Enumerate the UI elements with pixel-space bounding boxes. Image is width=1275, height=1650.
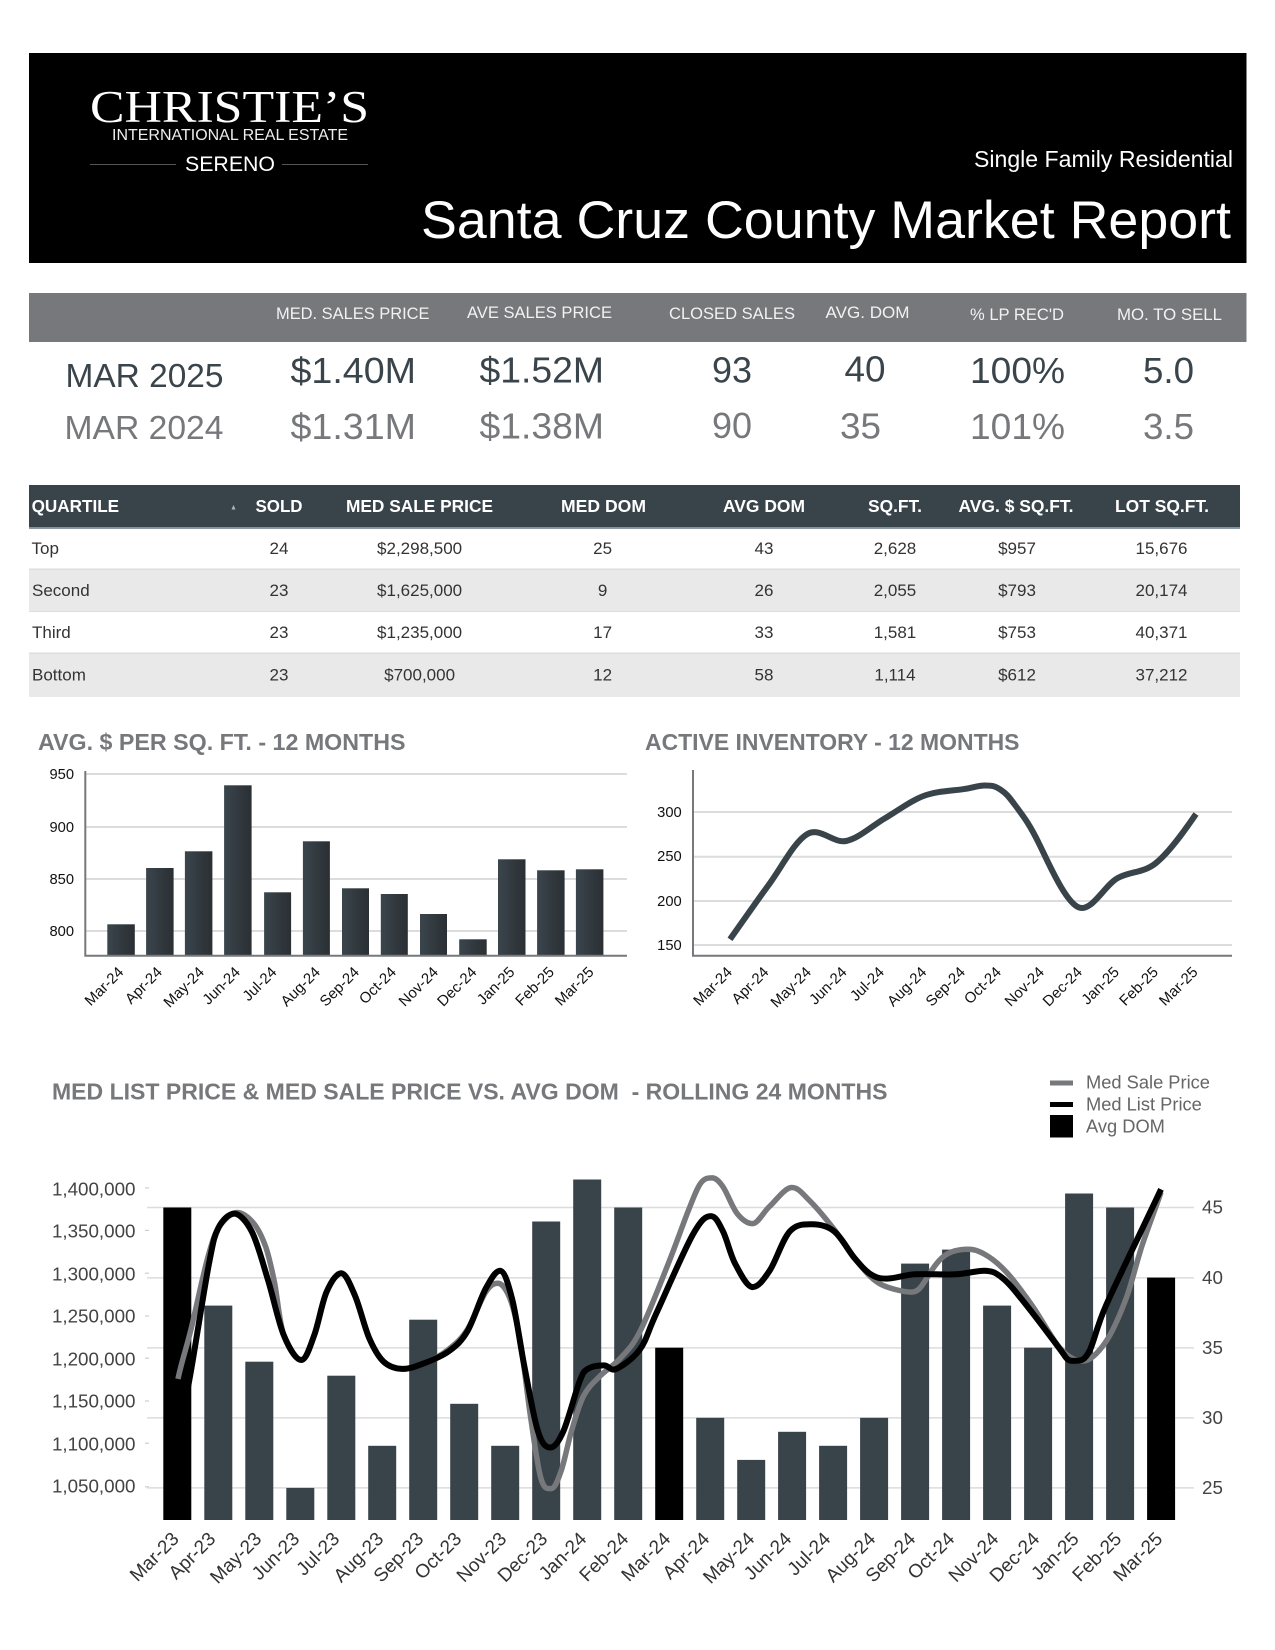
y axis labels [49,767,74,940]
left axis labels: 1,100,000 [52,1433,136,1454]
row: top quartile: 25 [593,539,612,558]
x axis labels: Mar-25 [1110,1529,1167,1586]
current period row: 93 [712,350,752,391]
x axis labels: Oct-24 [961,964,1005,1008]
prior year row: MAR 2024 [64,410,224,447]
row: third quartile: 40,371 [1136,623,1188,642]
row: second quartile: $793 [998,581,1036,600]
subtitle: Single Family Residential [974,146,1233,172]
y axis labels: 300 [657,805,682,821]
med sale price line [178,1178,1161,1489]
x axis labels: Mar-24 [690,964,736,1009]
heading: avg price per sq ft: AVG. $ PER SQ. FT. - 12 MONTHS [38,729,406,755]
left axis labels [52,1179,136,1496]
current period row: 100% [970,350,1065,391]
row: bottom quartile: 37,212 [1136,666,1188,685]
table header: MED SALE PRICE [346,496,493,516]
metric column headers: CLOSED SALES [669,304,795,323]
x axis labels: Sep-24 [862,1528,920,1587]
bar chart: avg price per sq ft [49,767,627,1011]
x axis labels: Oct-24 [904,1528,959,1584]
row: top quartile: Top [32,539,59,558]
table header: LOT SQ.FT. [1115,496,1209,516]
x axis labels: Jul-23 [293,1529,344,1580]
row: top quartile: $2,298,500 [377,539,462,558]
current period row: 40 [844,349,886,390]
x axis labels: Oct-23 [411,1529,466,1584]
x axis labels: Sep-24 [923,964,969,1010]
y axis labels: 950 [49,767,74,783]
x axis labels: Dec-24 [986,1528,1044,1587]
right axis labels: 40 [1202,1267,1223,1288]
table header: SOLD [256,496,302,516]
x axis labels: Jun-24 [806,964,851,1008]
x axis labels: Nov-24 [1002,964,1048,1010]
table header: QUARTILE [32,496,119,516]
x axis labels: Feb-25 [512,964,558,1009]
right axis labels: 45 [1202,1197,1223,1218]
row: second quartile: 2,055 [874,581,916,600]
x axis labels: Sep-24 [317,964,363,1010]
inventory line [730,786,1196,939]
row: third quartile: 33 [755,623,773,642]
legend [1050,1072,1210,1138]
x axis labels: Apr-24 [659,1528,714,1584]
prior year row: 101% [970,406,1065,447]
x axis labels: Jan-25 [1028,1529,1084,1585]
y axis labels: 200 [657,894,682,910]
right axis labels: 25 [1202,1477,1223,1498]
table header [32,496,1209,516]
row: bottom quartile: $612 [998,666,1036,685]
x axis labels: Apr-23 [165,1529,220,1584]
row: second quartile: 20,174 [1136,581,1188,600]
x axis labels: Feb-24 [576,1528,633,1586]
x axis labels: May-24 [767,964,815,1011]
right axis labels: 30 [1202,1407,1223,1428]
left axis labels: 1,200,000 [52,1348,136,1369]
x axis labels: Nov-23 [453,1529,511,1587]
logo: Christie's International Real Estate Sereno: CHRISTIE’S [90,82,369,132]
logo: Christie's International Real Estate Sereno: INTERNATIONAL REAL ESTATE [112,127,348,144]
row: bottom quartile: $700,000 [384,666,455,685]
combo chart: list and sale price vs avg DOM [52,1178,1223,1588]
y axis labels: 850 [49,872,74,888]
x axis labels: Dec-23 [494,1529,552,1587]
x axis labels: Jun-23 [248,1529,304,1585]
x axis labels: Mar-25 [1156,964,1202,1009]
x axis labels: Aug-24 [822,1528,880,1587]
x axis labels [690,964,1202,1011]
x axis labels: Dec-24 [1040,964,1086,1010]
x axis labels: Apr-24 [728,964,772,1008]
right axis labels: 35 [1202,1337,1223,1358]
x axis labels: Aug-23 [330,1529,388,1587]
row: top quartile [32,539,1188,558]
panel: quartile table [29,485,1240,697]
current period row: 5.0 [1143,350,1194,391]
x axis labels: Feb-25 [1116,964,1162,1009]
header banner [29,53,1246,263]
metric column headers: AVE SALES PRICE [467,303,612,322]
row: bottom quartile: 1,114 [874,666,916,685]
prior year row: $1.31M [290,406,416,447]
logo: Christie's International Real Estate Sereno: SERENO [185,153,275,176]
panel: key metrics summary [29,293,1246,447]
row: third quartile: 23 [270,623,288,642]
table header: SQ.FT. [868,496,922,516]
row: top quartile: $957 [998,539,1036,558]
prior year row: $1.38M [480,406,604,447]
med list price line [180,1189,1161,1448]
x axis labels: Mar-24 [618,1528,675,1586]
x axis labels: Sep-23 [370,1529,428,1587]
prior year row [64,405,1194,447]
row: bottom quartile [32,666,1188,685]
row: bottom quartile: 12 [593,666,612,685]
x axis labels [126,1528,1167,1588]
x axis labels: Jun-24 [740,1528,796,1585]
current period row: $1.40M [290,350,416,391]
current period row [66,349,1194,395]
x axis labels: Aug-24 [884,964,930,1010]
row: second quartile: 23 [270,581,288,600]
row: top quartile: 24 [270,539,288,558]
x axis labels: Jan-25 [474,964,518,1008]
left axis labels: 1,150,000 [52,1390,136,1412]
left axis labels: 1,350,000 [52,1220,136,1242]
x axis labels: Mar-24 [82,964,127,1009]
x axis labels: Nov-24 [945,1528,1003,1587]
x axis labels: Jan-25 [1078,964,1123,1008]
right axis labels [1202,1197,1223,1498]
row: third quartile: $753 [998,623,1036,642]
row: third quartile: Third [32,623,71,642]
heading: rolling 24 months: MED LIST PRICE & MED SALE PRICE VS. AVG DOM - ROLLING 24 MONTHS [52,1078,888,1104]
title: Santa Cruz County Market Report [421,191,1231,250]
table header: AVG. $ SQ.FT. [958,496,1074,516]
prior year row: 3.5 [1143,406,1194,447]
left axis labels: 1,250,000 [52,1306,136,1326]
x axis labels: Mar-25 [552,964,597,1009]
x axis labels: May-23 [206,1529,266,1588]
x axis labels: Dec-24 [434,964,480,1010]
y axis labels: 250 [657,849,682,865]
row: third quartile [32,623,1188,642]
y axis labels: 900 [49,820,74,836]
legend: Med Sale Price [1086,1072,1210,1093]
prior year row: 35 [840,406,881,446]
metric column headers: % LP REC'D [970,305,1064,324]
row: bottom quartile: 23 [270,666,288,685]
row: second quartile: 9 [598,581,607,600]
x axis labels: Apr-24 [122,964,166,1008]
legend: Avg DOM [1086,1116,1165,1136]
row: third quartile: $1,235,000 [377,623,462,642]
left axis labels: 1,400,000 [52,1179,136,1200]
x axis labels: Nov-24 [396,964,442,1010]
metric column headers: AVG. DOM [826,303,910,322]
metric column headers: MO. TO SELL [1117,305,1222,324]
logo: Christie's International Real Estate Sereno [90,82,369,176]
row: second quartile: Second [32,581,90,600]
current period row: $1.52M [480,350,604,391]
row: third quartile: 1,581 [874,623,916,642]
x axis labels: Jan-24 [535,1528,591,1585]
prior year row: 90 [712,405,752,446]
row: second quartile: $1,625,000 [377,581,462,600]
x axis labels: Jul-24 [239,964,280,1005]
row: second quartile: 26 [755,581,773,600]
metric column headers [276,303,1222,324]
x axis labels: Feb-25 [1069,1529,1126,1586]
avg DOM bars [163,1180,1175,1520]
row: bottom quartile: Bottom [32,666,86,685]
heading: active inventory: ACTIVE INVENTORY - 12 MONTHS [645,729,1020,755]
x axis labels: Oct-24 [356,964,400,1008]
x axis labels: Mar-23 [126,1529,184,1586]
y axis labels: 150 [657,938,682,954]
legend: Med List Price [1086,1094,1202,1115]
row: third quartile: 17 [593,623,612,642]
metric column headers: MED. SALES PRICE [276,304,430,323]
y axis labels [657,805,682,954]
line chart: active inventory [657,770,1232,1011]
x axis labels: Jun-24 [199,964,244,1008]
row: top quartile: 2,628 [874,539,916,558]
x axis labels: Jul-24 [784,1528,835,1580]
left axis labels: 1,300,000 [52,1264,136,1285]
row: bottom quartile: 58 [755,666,773,685]
row: top quartile: 43 [755,539,773,558]
table header: MED DOM [561,496,646,516]
x axis labels: May-24 [699,1528,759,1588]
left axis labels: 1,050,000 [52,1476,136,1496]
current period row: MAR 2025 [66,358,224,395]
x axis labels: Aug-24 [278,964,324,1010]
bars [107,785,603,955]
table header: AVG DOM [723,496,805,516]
x axis labels [82,964,597,1011]
x axis labels: Jul-24 [847,964,888,1005]
x axis labels: May-24 [160,964,208,1011]
row: second quartile [32,581,1188,600]
y axis labels: 800 [49,924,74,940]
row: top quartile: 15,676 [1136,539,1188,558]
